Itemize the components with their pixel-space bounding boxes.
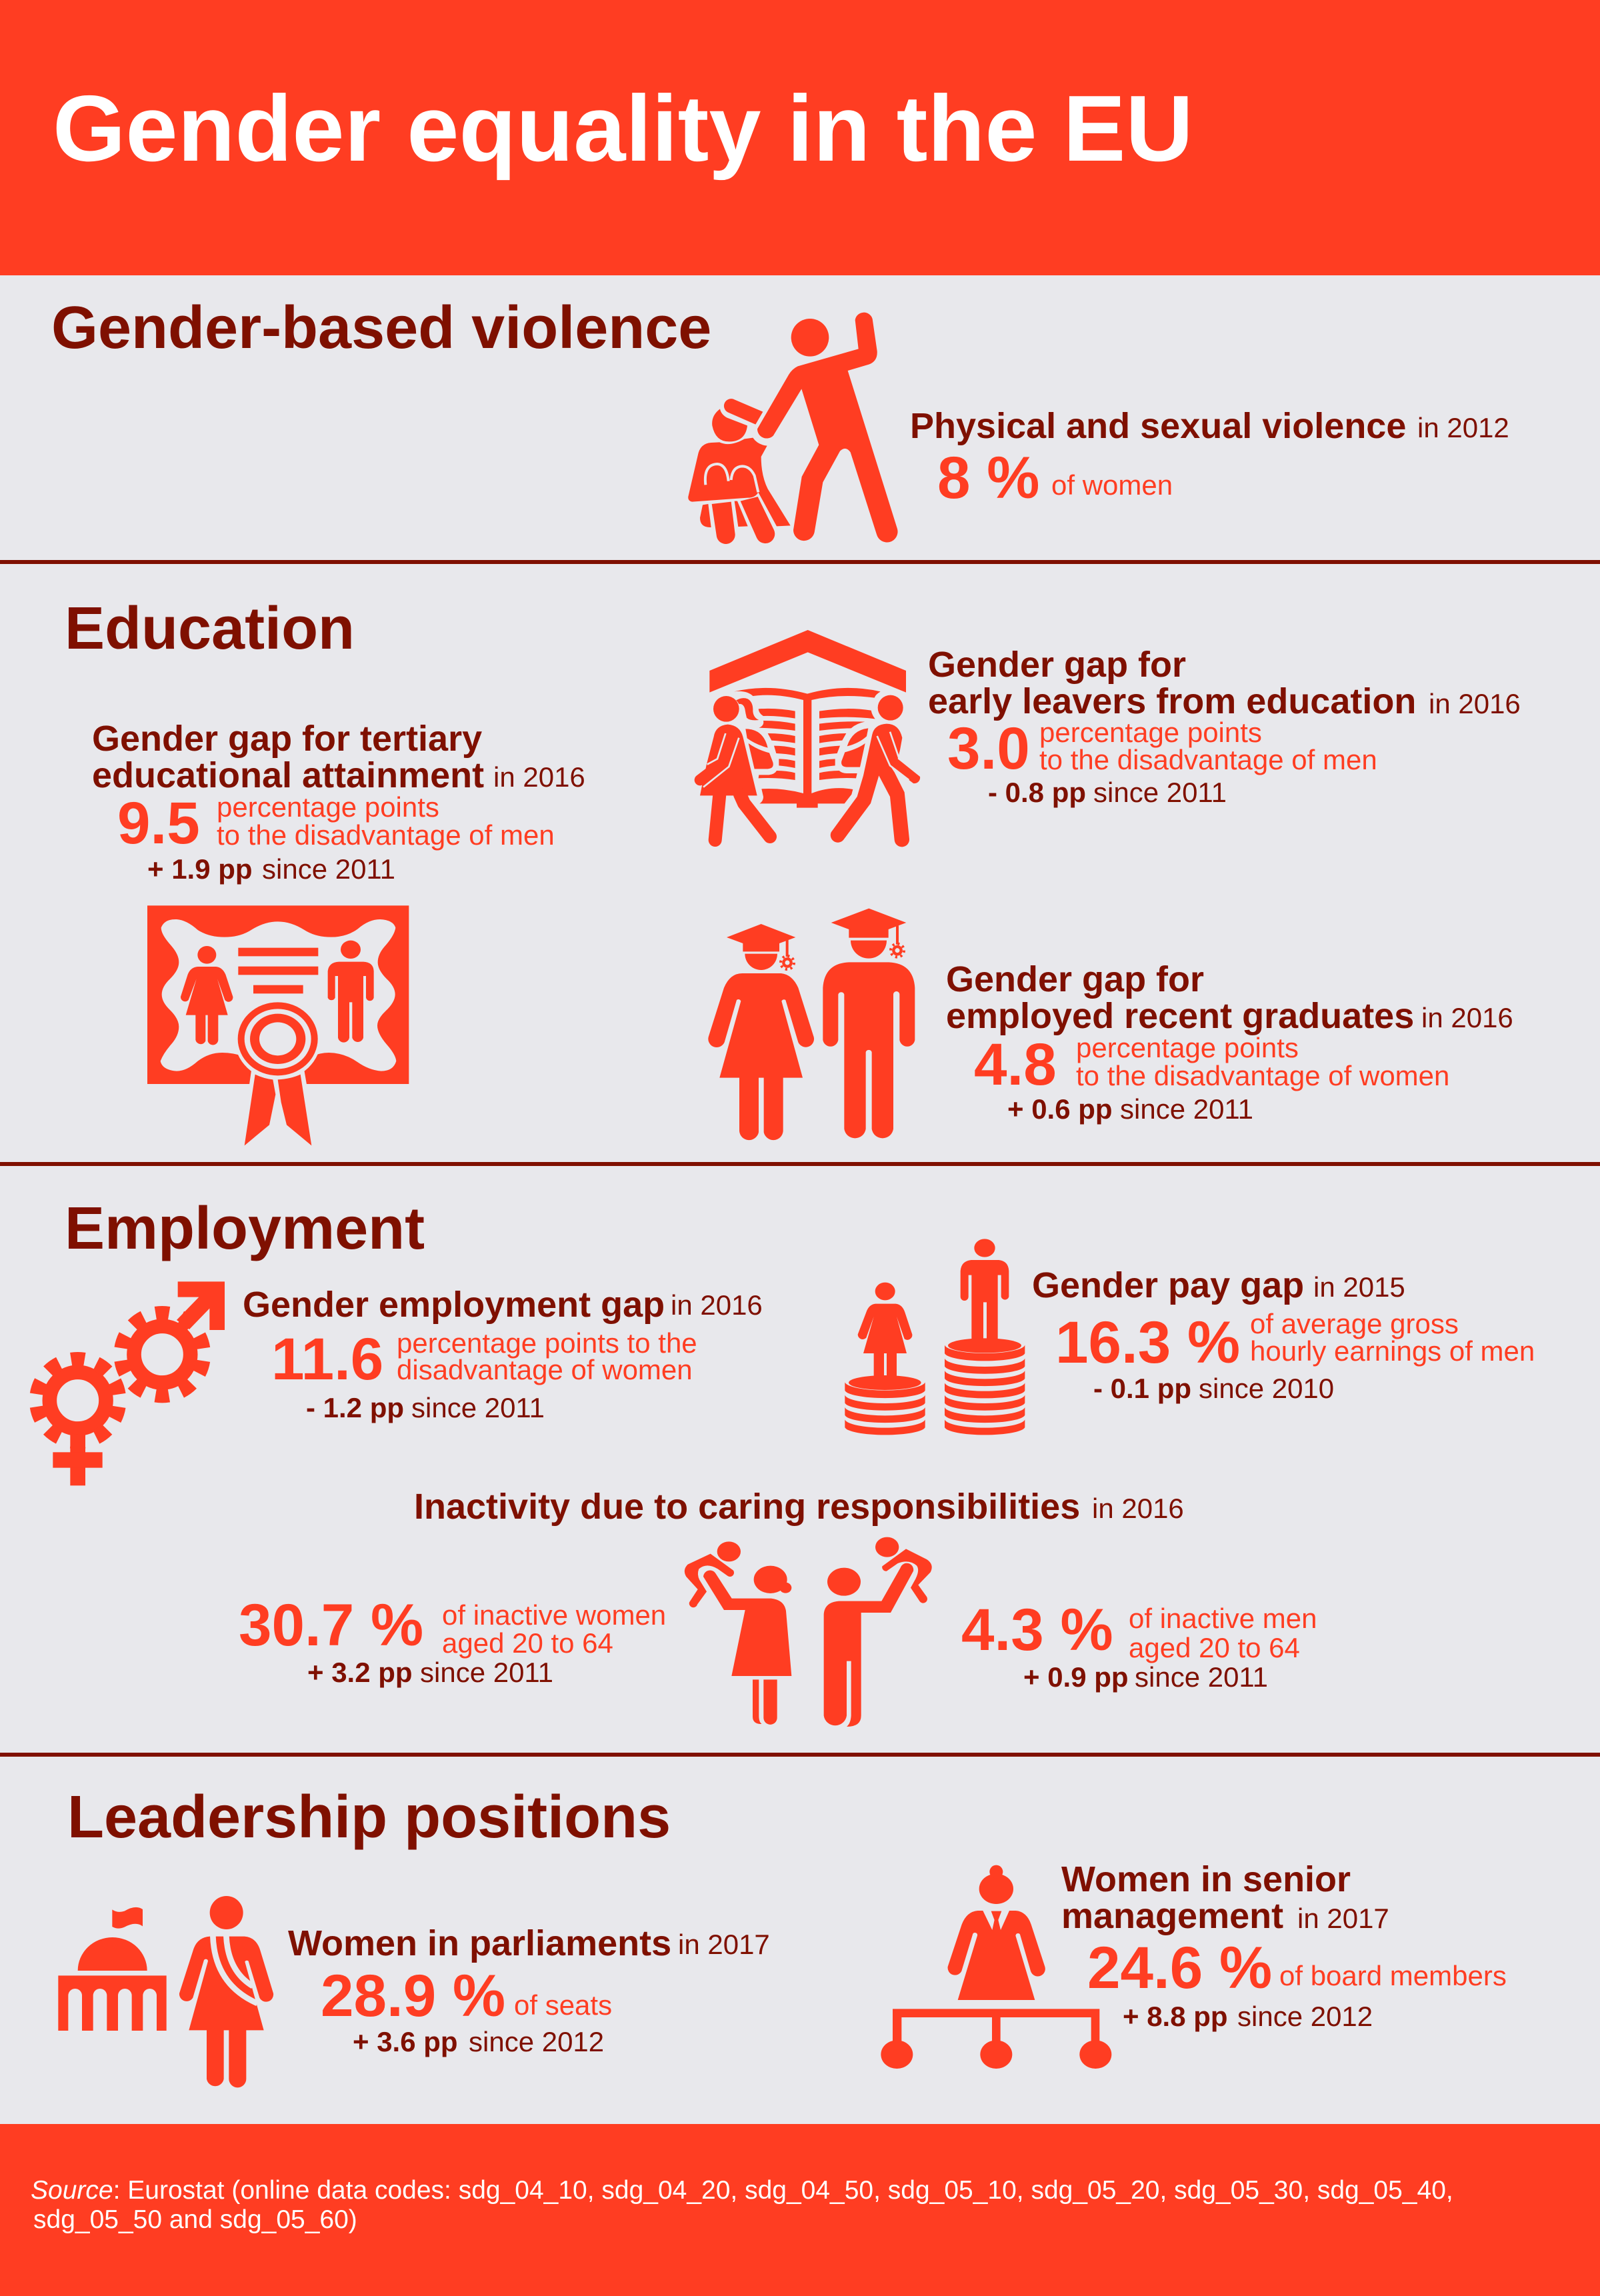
value: 3.0: 3.0 (947, 715, 1030, 781)
icon: businesswoman above organisation chart (881, 1865, 1111, 2069)
indicator: employed recent graduates (946, 959, 1513, 1125)
description line 2: aged 20 to 64 (1129, 1632, 1300, 1663)
description: percentage points to the (397, 1327, 697, 1359)
icon: diploma with woman, man and ribbon seal (147, 905, 409, 1145)
source note line 2: sdg_05_50 and sdg_05_60) (33, 2205, 357, 2234)
value: 11.6: 11.6 (271, 1325, 383, 1392)
description: of inactive women (442, 1599, 666, 1631)
indicator title: Inactivity due to caring responsibilities (414, 1487, 1080, 1527)
indicator title: Gender gap for (946, 959, 1204, 999)
since: since 2011 (1093, 777, 1227, 808)
indicator: early leavers from education (928, 645, 1521, 808)
heading: gender-based violence: Gender-based violence (51, 295, 711, 361)
icon: woman and man lifting babies (685, 1537, 932, 1727)
panel: employment (0, 1166, 1600, 1754)
description line 2: hourly earnings of men (1250, 1335, 1535, 1367)
indicator title line 2: management (1061, 1896, 1283, 1936)
description line 2: to the disadvantage of women (1076, 1060, 1449, 1091)
value: 16.3 %: 16.3 % (1055, 1309, 1240, 1375)
icon: woman and man on coin stacks (845, 1239, 1025, 1435)
heading: education: Education (65, 595, 355, 662)
value: 9.5: 9.5 (117, 789, 200, 856)
description: percentage points (217, 791, 439, 823)
value: 28.9 %: 28.9 % (321, 1962, 505, 2029)
since: since 2011 (1135, 1661, 1268, 1693)
panel: education (0, 564, 1600, 1163)
year: in 2017 (1297, 1903, 1389, 1934)
description: of inactive men (1129, 1603, 1317, 1634)
indicator: gender pay gap (1032, 1265, 1535, 1404)
change since 2011: + 0.9 pp (1023, 1661, 1129, 1693)
description: percentage points (1076, 1032, 1299, 1063)
indicator title: Women in senior (1061, 1859, 1351, 1899)
icon: parliament building and woman with sash (58, 1896, 273, 2087)
value: 4.8: 4.8 (974, 1031, 1057, 1097)
since: since 2012 (1237, 2001, 1373, 2032)
since: since 2011 (411, 1392, 545, 1423)
value: 30.7 %: 30.7 % (239, 1591, 423, 1658)
change since 2012: + 8.8 pp (1123, 2001, 1228, 2032)
change since 2011: + 0.6 pp (1007, 1093, 1113, 1125)
year: in 2016 (1429, 688, 1521, 719)
indicator: gender employment gap (243, 1285, 763, 1423)
icon: man striking crouching woman (688, 313, 898, 544)
since: since 2012 (469, 2026, 604, 2057)
year: in 2016 (1421, 1002, 1513, 1033)
since: since 2011 (1120, 1093, 1253, 1125)
indicator title line 2: early leavers from education (928, 681, 1416, 721)
since: since 2011 (262, 853, 395, 885)
panel: gender-based violence (0, 275, 1600, 561)
indicator: women in senior management (1061, 1859, 1507, 2032)
description: percentage points (1039, 717, 1262, 748)
indicator: women in parliaments (288, 1923, 770, 2057)
indicator title: Physical and sexual violence (910, 406, 1406, 446)
change since 2011: - 0.8 pp (988, 777, 1086, 808)
indicator: inactivity due to caring responsibilities (239, 1487, 1317, 1693)
indicator title: Gender employment gap (243, 1285, 665, 1325)
change since 2011: + 3.2 pp (307, 1657, 413, 1688)
description: of seats (514, 1989, 612, 2021)
description: of women (1051, 469, 1173, 501)
change since 2012: + 3.6 pp (353, 2026, 458, 2057)
indicator title: Gender gap for (928, 645, 1186, 685)
description line 2: to the disadvantage of men (217, 819, 555, 851)
icon: gears with gender symbols (26, 1281, 225, 1485)
heading: employment: Employment (65, 1195, 425, 1262)
year: in 2016 (671, 1289, 763, 1321)
description: of average gross (1250, 1308, 1459, 1339)
since: since 2010 (1199, 1373, 1334, 1404)
value: 8 %: 8 % (937, 444, 1039, 511)
icon: book under roof with woman and man walking (700, 630, 920, 847)
panel: leadership positions (0, 1757, 1600, 2124)
description line 2: aged 20 to 64 (442, 1627, 613, 1659)
footer band (0, 2124, 1600, 2296)
year: in 2016 (493, 761, 585, 793)
year: in 2012 (1417, 412, 1509, 443)
indicator title: Gender gap for tertiary (92, 719, 482, 759)
indicator: tertiary educational attainment (92, 719, 585, 885)
indicator title line 2: educational attainment (92, 755, 484, 795)
indicator: physical and sexual violence (910, 406, 1509, 511)
year: in 2017 (678, 1929, 770, 1960)
indicator title: Women in parliaments (288, 1923, 671, 1963)
icon: woman and man graduates (708, 909, 915, 1140)
year: in 2015 (1313, 1271, 1405, 1303)
change since 2011: + 1.9 pp (147, 853, 253, 885)
indicator title: Gender pay gap (1032, 1265, 1304, 1305)
change since 2011: - 1.2 pp (306, 1392, 404, 1423)
value: 24.6 %: 24.6 % (1087, 1934, 1272, 2001)
year: in 2016 (1092, 1493, 1184, 1524)
value: 4.3 %: 4.3 % (961, 1596, 1113, 1663)
description line 2: to the disadvantage of men (1039, 744, 1377, 775)
header band (0, 0, 1600, 275)
description line 2: disadvantage of women (397, 1354, 693, 1385)
description: of board members (1279, 1960, 1507, 1991)
title: Gender equality in the EU (53, 76, 1193, 181)
heading: leadership positions: Leadership positions (67, 1784, 671, 1851)
indicator title line 2: employed recent graduates (946, 996, 1414, 1036)
since: since 2011 (420, 1657, 553, 1688)
change since 2010: - 0.1 pp (1093, 1373, 1191, 1404)
source note: Source: Eurostat (online data codes: sdg_04_10, sdg_04_20, sdg_04_50, sdg_05_10, sdg_05_20, sdg_05_30, sdg_05_40, (31, 2176, 1453, 2205)
